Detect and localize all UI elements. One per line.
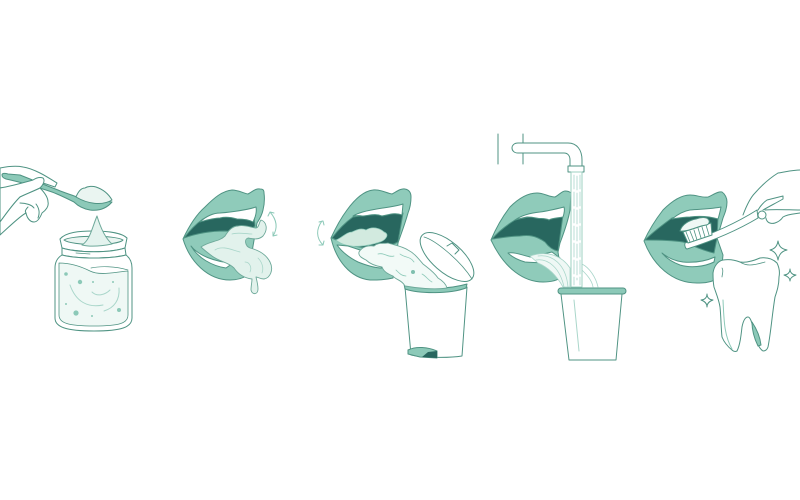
icon: wall lines [498,134,523,164]
icon: liquid being spat [201,220,272,294]
icon: faucet [512,143,582,166]
icon: hand with spoon [0,166,112,235]
icon: cup [561,294,622,360]
panel: spitting into bin [318,189,482,358]
mouth [331,189,411,280]
icon: bin [404,224,482,358]
panel: rinsing with faucet [491,134,626,360]
icon: hand [743,170,800,223]
panel: jar and spoon [0,166,132,331]
icon: motion arrow [318,221,324,245]
panel: swishing mouth [183,189,277,294]
icon: water stream [530,254,570,287]
mouth [491,191,571,282]
icon: tooth [713,258,779,351]
icon: toothbrush [685,210,758,249]
mouth [644,192,727,283]
icon: spat foam [359,243,447,289]
mouth [183,189,264,280]
icon: sparkles [701,241,796,307]
icon: jar [55,216,132,331]
icon: motion arrow [268,212,277,236]
panel: brushing and tooth [644,170,800,351]
